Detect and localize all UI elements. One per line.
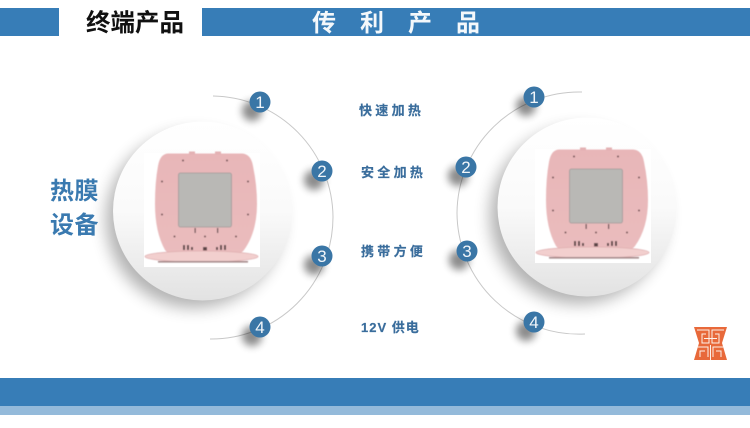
right badge 4: 4 [529, 313, 539, 332]
right badge 3: 3 [462, 242, 472, 261]
side label: heating film device: 热膜 [50, 178, 99, 205]
left badge 2: 2 [317, 162, 327, 181]
footer band: light blue [0, 406, 750, 415]
left badge 3 [304, 246, 332, 275]
footer band: dark blue [0, 378, 750, 406]
header bar: left blue segment [0, 8, 59, 36]
side label: heating film device [50, 178, 99, 239]
product image: left heating film device [144, 152, 260, 267]
right badge 2: 2 [461, 158, 471, 177]
feature label: 12V power: 12V 供电 [361, 320, 420, 335]
feature label: fast heating: 快速加热 [359, 103, 424, 118]
right badge 4 [516, 312, 544, 341]
header bar: right blue segment [202, 8, 750, 36]
left badge 2 [304, 160, 332, 190]
right arc [457, 92, 585, 334]
heading: terminal products: 终端产品 [86, 9, 184, 37]
feature label: portable: 携带方便 [361, 244, 426, 259]
right badge 2 [448, 156, 476, 186]
right badge 3 [449, 240, 478, 270]
left disc with product [106, 122, 292, 308]
side label: heating film device: 设备 [50, 212, 99, 239]
icon: orange seal logo [694, 327, 727, 360]
left badge 1 [242, 92, 270, 121]
left arc [210, 96, 333, 339]
left badge 3: 3 [317, 247, 327, 266]
product image: right heating film device [535, 148, 651, 263]
feature label: safe heating: 安全加热 [361, 165, 426, 180]
heading: patent products: 传利产品 [312, 10, 504, 37]
left badge 4 [242, 316, 270, 346]
left badge 4: 4 [255, 318, 265, 337]
right badge 1 [516, 86, 544, 116]
right badge 1: 1 [529, 88, 539, 107]
left badge 1: 1 [255, 93, 265, 112]
right disc with product [490, 118, 676, 304]
